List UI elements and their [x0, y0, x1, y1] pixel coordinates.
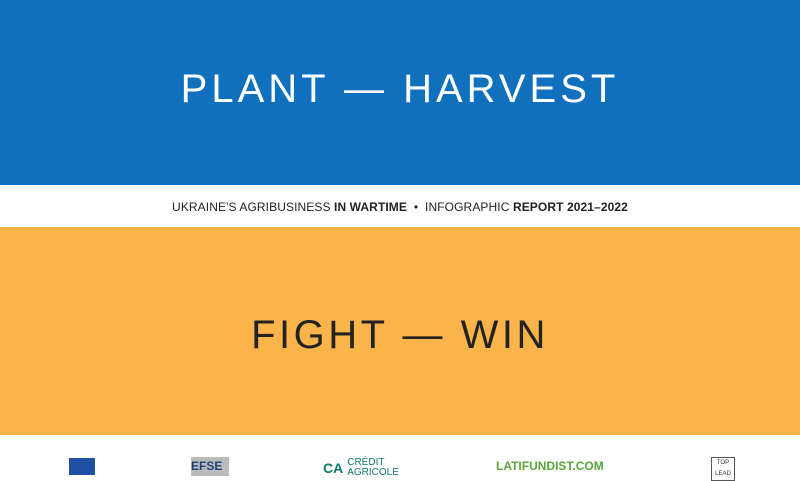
- logo: latifundist: LATIFUNDIST.COM: [496, 459, 604, 473]
- panel: blue top: [0, 0, 800, 185]
- panel: yellow bottom: [0, 227, 800, 435]
- logo: top lead: TOP: [717, 460, 729, 466]
- title: plant harvest: PLANT — HARVEST: [181, 67, 619, 111]
- logo: top lead: LEAD: [715, 471, 731, 477]
- logo: EU: [69, 458, 95, 475]
- logo: EFSE: [191, 457, 229, 476]
- logos row: [69, 456, 735, 481]
- logo: EFSE: EFSE: [191, 459, 222, 473]
- subtitle strip: UKRAINE'S AGRIBUSINESS IN WARTIME • INFOGRAPHIC REPORT 2021–2022: [172, 200, 628, 214]
- logo: credit agricole: CA: [323, 460, 343, 476]
- logo: credit agricole: AGRICOLE: [347, 467, 399, 478]
- logo: credit agricole: CRÉDIT: [347, 457, 384, 468]
- logo: top lead: [711, 457, 735, 481]
- logo: credit agricole: [323, 456, 399, 478]
- title: fight win: FIGHT — WIN: [251, 313, 549, 357]
